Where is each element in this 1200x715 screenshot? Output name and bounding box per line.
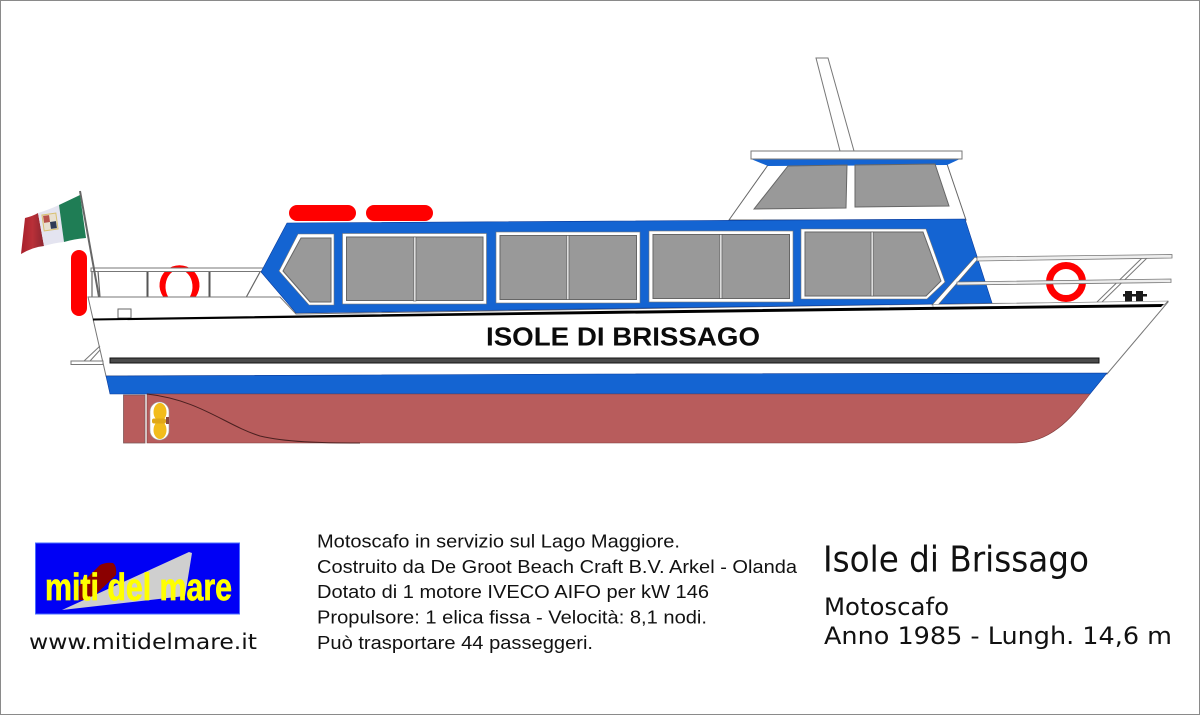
logo: miti del mare bbox=[36, 543, 240, 614]
window 2 bbox=[342, 234, 486, 304]
description text: Può trasportare 44 passeggeri. bbox=[317, 633, 593, 653]
description text bbox=[317, 532, 798, 653]
description text: Dotato di 1 motore IVECO AIFO per kW 146 bbox=[317, 582, 709, 602]
hull white topsides bbox=[88, 297, 1168, 376]
boat illustration bbox=[21, 58, 1172, 443]
underwater hull bbox=[147, 394, 1090, 443]
forward white brace bbox=[932, 257, 978, 305]
sheer line bbox=[93, 304, 1164, 320]
swim platform bbox=[71, 346, 103, 364]
window 4 bbox=[649, 231, 793, 302]
description text: Motoscafo in servizio sul Lago Maggiore. bbox=[317, 532, 680, 552]
year and length: Anno 1985 - Lungh. 14,6 m bbox=[824, 622, 1172, 650]
description text: Costruito da De Groot Beach Craft B.V. Arkel - Olanda bbox=[317, 557, 798, 577]
keel curve bbox=[147, 394, 360, 443]
logo: miti del mare: miti del mare bbox=[45, 567, 232, 609]
vessel type: Motoscafo bbox=[824, 593, 949, 621]
small aft hatch bbox=[118, 309, 131, 318]
aft railing bbox=[91, 268, 263, 316]
deck edge bbox=[933, 301, 1168, 308]
cabin blue bbox=[261, 219, 992, 313]
flag pole bbox=[80, 191, 99, 297]
window 5 bbox=[801, 229, 945, 299]
roof lights bbox=[289, 205, 433, 221]
forward railing bbox=[977, 254, 1172, 302]
blue boot stripe bbox=[106, 373, 1107, 394]
bow bitts bbox=[1123, 291, 1147, 302]
window 3 bbox=[496, 232, 640, 303]
wheelhouse bbox=[729, 151, 966, 220]
propeller bbox=[150, 402, 169, 440]
website: www.mitidelmare.it bbox=[29, 630, 257, 654]
title block bbox=[823, 540, 1172, 650]
stern fender bbox=[71, 250, 87, 316]
title: Isole di Brissago bbox=[823, 540, 1089, 580]
mid forward rail bbox=[957, 279, 1171, 285]
bow life ring bbox=[1050, 266, 1082, 298]
mast bbox=[816, 58, 854, 151]
flag bbox=[21, 195, 86, 254]
dark stripe bbox=[110, 358, 1099, 363]
description text: Propulsore: 1 elica fissa - Velocità: 8,1 nodi. bbox=[317, 608, 707, 628]
boat name: ISOLE DI BRISSAGO bbox=[486, 322, 760, 352]
window 1 bbox=[279, 234, 334, 305]
rudder bbox=[124, 395, 145, 443]
aft life ring bbox=[91, 265, 263, 296]
